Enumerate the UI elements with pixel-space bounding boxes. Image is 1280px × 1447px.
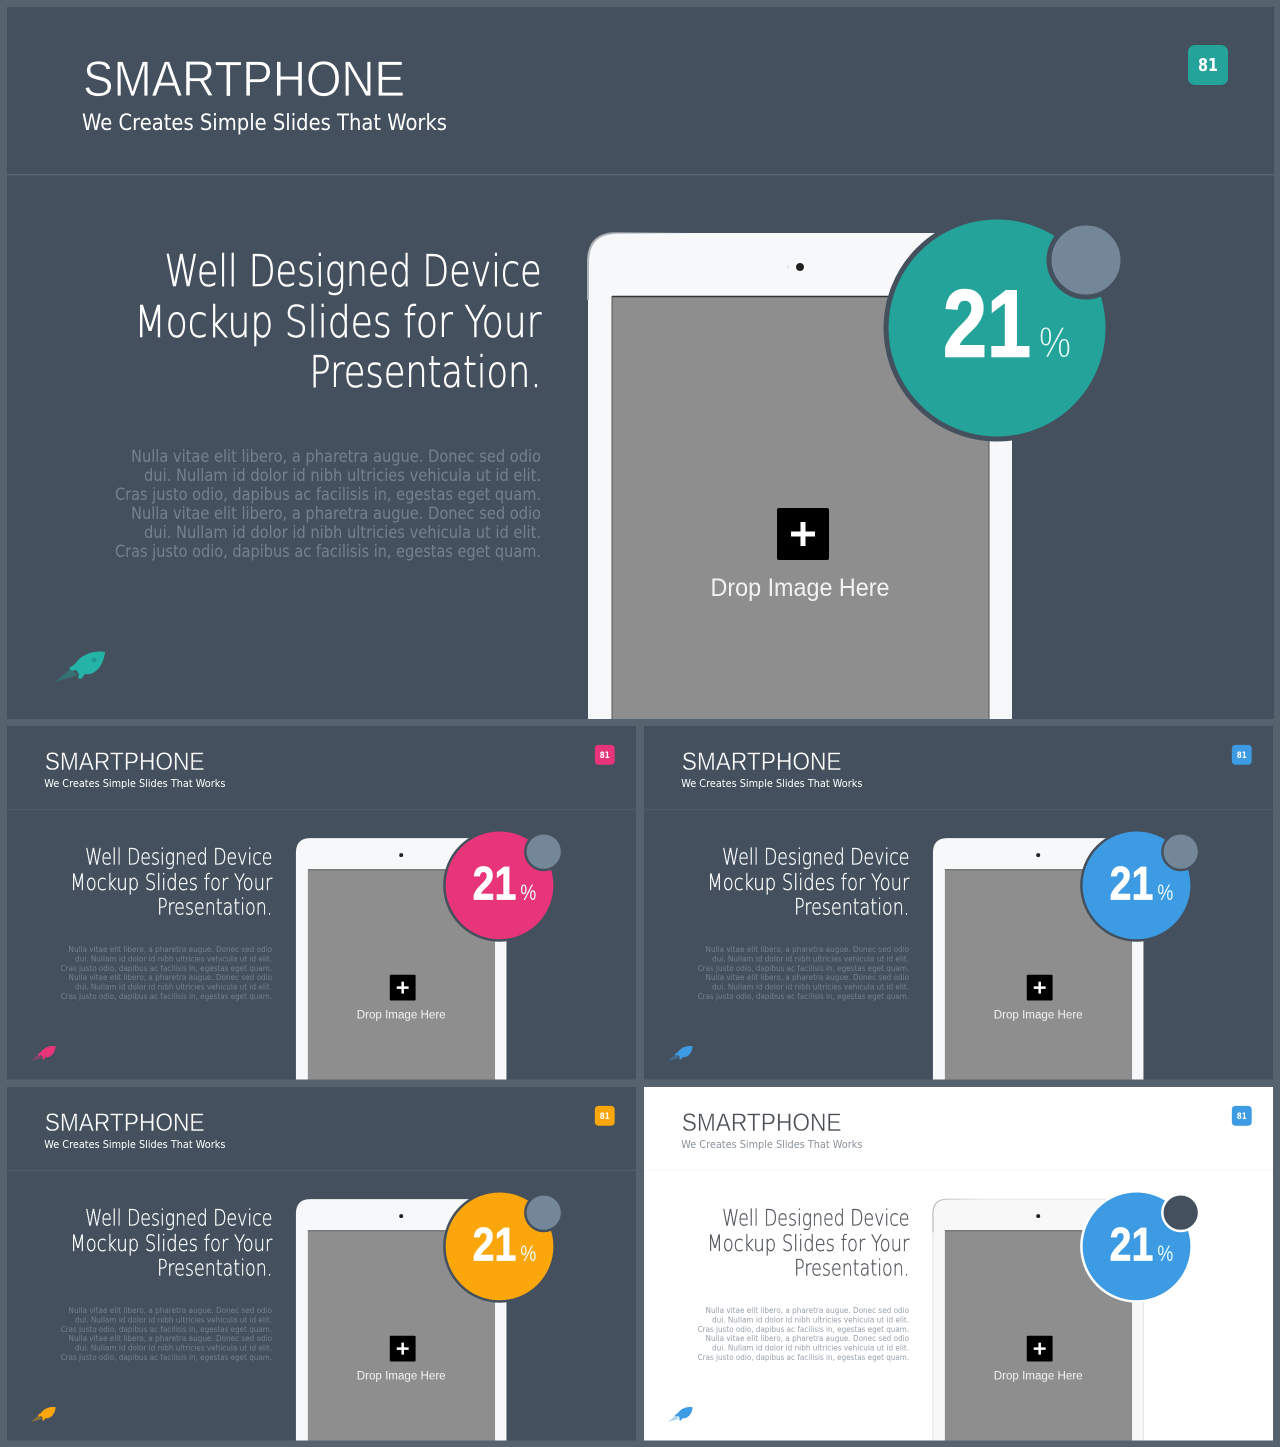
drop image placeholder <box>357 1336 446 1382</box>
body text: Nulla vitae elit libero, a pharetra augue. Donec sed odio <box>69 1305 272 1315</box>
body text: dui. Nullam id dolor id nibh ultricies vehicula ut id elit. <box>75 953 272 963</box>
body text <box>698 1305 909 1362</box>
body text: Nulla vitae elit libero, a pharetra augue. Donec sed odio <box>131 447 541 466</box>
badge: 81 <box>1198 55 1218 76</box>
badge <box>1232 745 1252 765</box>
heading <box>710 847 910 915</box>
body text: Cras justo odio, dapibus ac facilisis in, egestas eget quam. <box>698 1352 909 1362</box>
heading <box>707 1206 909 1282</box>
heading: Mockup Slides for Your <box>134 297 542 348</box>
drop image placeholder <box>357 975 446 1021</box>
stat circle: % <box>1039 318 1071 367</box>
stat circle: % <box>520 880 536 905</box>
heading: Presentation. <box>310 347 542 398</box>
badge: 81 <box>600 751 610 761</box>
heading: Presentation. <box>794 1257 909 1282</box>
icon: rocket <box>668 1046 693 1061</box>
icon: rocket <box>31 1046 56 1061</box>
subtitle: We Creates Simple Slides That Works <box>44 777 226 790</box>
body text: dui. Nullam id dolor id nibh ultricies vehicula ut id elit. <box>75 1314 272 1324</box>
body text <box>61 944 272 1001</box>
badge <box>1188 45 1228 85</box>
title: SMARTPHONE <box>83 51 405 107</box>
tablet mockup <box>588 233 1012 719</box>
body text: Cras justo odio, dapibus ac facilisis in, egestas eget quam. <box>698 991 909 1001</box>
body text: Nulla vitae elit libero, a pharetra augue. Donec sed odio <box>706 1333 909 1343</box>
body text: dui. Nullam id dolor id nibh ultricies vehicula ut id elit. <box>144 523 541 542</box>
badge <box>595 745 615 765</box>
heading: Mockup Slides for Your <box>70 871 272 896</box>
subtitle: We Creates Simple Slides That Works <box>681 1138 863 1151</box>
body text: dui. Nullam id dolor id nibh ultricies vehicula ut id elit. <box>712 1343 909 1353</box>
icon: rocket <box>55 652 105 682</box>
stat circle <box>444 830 562 940</box>
body text: Cras justo odio, dapibus ac facilisis in, egestas eget quam. <box>61 963 272 973</box>
badge <box>595 1106 615 1126</box>
body text: dui. Nullam id dolor id nibh ultricies vehicula ut id elit. <box>712 1314 909 1324</box>
panel: large teal slide <box>7 7 1274 719</box>
tablet mockup <box>933 838 1143 1079</box>
heading: Well Designed Device <box>164 246 542 297</box>
body text <box>698 944 909 1001</box>
body text <box>61 1305 272 1362</box>
stat circle: % <box>1157 1241 1173 1266</box>
stat circle: % <box>520 1241 536 1266</box>
heading <box>73 847 272 915</box>
heading: Presentation. <box>794 896 909 921</box>
heading: Mockup Slides for Your <box>70 1232 272 1257</box>
heading: Mockup Slides for Your <box>707 1232 909 1257</box>
heading: Well Designed Device <box>722 845 909 870</box>
body text: Cras justo odio, dapibus ac facilisis in, egestas eget quam. <box>61 1324 272 1334</box>
subtitle: We Creates Simple Slides That Works <box>82 111 447 136</box>
subtitle: We Creates Simple Slides That Works <box>681 777 863 790</box>
heading <box>140 252 542 388</box>
drop image placeholder: Drop Image Here <box>710 574 890 602</box>
heading: Well Designed Device <box>85 845 272 870</box>
stat circle: 21 <box>473 1219 516 1272</box>
body text: dui. Nullam id dolor id nibh ultricies vehicula ut id elit. <box>712 982 909 992</box>
body text: Cras justo odio, dapibus ac facilisis in, egestas eget quam. <box>698 963 909 973</box>
body text: dui. Nullam id dolor id nibh ultricies vehicula ut id elit. <box>75 982 272 992</box>
title: SMARTPHONE <box>45 749 205 776</box>
body text: Nulla vitae elit libero, a pharetra augue. Donec sed odio <box>69 1333 272 1343</box>
stat circle <box>1081 1191 1199 1301</box>
title: SMARTPHONE <box>682 1110 842 1137</box>
panel: pink slide <box>7 726 636 1079</box>
body text: Nulla vitae elit libero, a pharetra augue. Donec sed odio <box>706 1305 909 1315</box>
heading: Mockup Slides for Your <box>707 871 909 896</box>
stat circle <box>886 217 1123 439</box>
panel: blue slide <box>644 726 1273 1079</box>
body text: Cras justo odio, dapibus ac facilisis in, egestas eget quam. <box>115 542 541 561</box>
stat circle <box>444 1191 562 1301</box>
title: SMARTPHONE <box>45 1110 205 1137</box>
stat circle: 21 <box>473 858 516 911</box>
title: SMARTPHONE <box>682 749 842 776</box>
subtitle: We Creates Simple Slides That Works <box>44 1138 226 1151</box>
tablet mockup <box>296 838 506 1079</box>
badge <box>1232 1106 1252 1126</box>
heading: Well Designed Device <box>85 1206 272 1231</box>
body text: dui. Nullam id dolor id nibh ultricies vehicula ut id elit. <box>75 1343 272 1353</box>
body text: Nulla vitae elit libero, a pharetra augue. Donec sed odio <box>706 972 909 982</box>
body text: Cras justo odio, dapibus ac facilisis in, egestas eget quam. <box>115 485 541 504</box>
body text: Nulla vitae elit libero, a pharetra augue. Donec sed odio <box>69 944 272 954</box>
body text <box>115 447 541 561</box>
body text: Cras justo odio, dapibus ac facilisis in, egestas eget quam. <box>698 1324 909 1334</box>
drop image placeholder: Drop Image Here <box>994 1368 1083 1382</box>
icon: rocket <box>668 1407 693 1422</box>
heading <box>73 1208 272 1276</box>
drop image placeholder <box>994 975 1083 1021</box>
drop image placeholder: Drop Image Here <box>994 1007 1083 1021</box>
badge: 81 <box>1237 751 1247 761</box>
body text: Cras justo odio, dapibus ac facilisis in, egestas eget quam. <box>61 991 272 1001</box>
stat circle <box>1081 830 1199 940</box>
body text: Nulla vitae elit libero, a pharetra augue. Donec sed odio <box>706 944 909 954</box>
tablet mockup <box>296 1199 506 1440</box>
stat circle: 21 <box>1110 858 1153 911</box>
body text: dui. Nullam id dolor id nibh ultricies vehicula ut id elit. <box>144 466 541 485</box>
panel: orange slide <box>7 1087 636 1440</box>
stat circle: % <box>1157 880 1173 905</box>
badge: 81 <box>600 1112 610 1122</box>
tablet mockup <box>933 1199 1143 1440</box>
heading: Well Designed Device <box>722 1206 909 1231</box>
stat circle: 21 <box>943 270 1031 378</box>
body text: Cras justo odio, dapibus ac facilisis in, egestas eget quam. <box>61 1352 272 1362</box>
drop image placeholder <box>994 1336 1083 1382</box>
heading: Presentation. <box>157 1257 272 1282</box>
drop image placeholder: Drop Image Here <box>357 1368 446 1382</box>
drop image placeholder <box>710 508 890 602</box>
body text: Nulla vitae elit libero, a pharetra augue. Donec sed odio <box>69 972 272 982</box>
stat circle: 21 <box>1110 1219 1153 1272</box>
badge: 81 <box>1237 1112 1247 1122</box>
icon: rocket <box>31 1407 56 1422</box>
panel: white slide <box>644 1087 1273 1440</box>
heading: Presentation. <box>157 896 272 921</box>
drop image placeholder: Drop Image Here <box>357 1007 446 1021</box>
body text: dui. Nullam id dolor id nibh ultricies vehicula ut id elit. <box>712 953 909 963</box>
body text: Nulla vitae elit libero, a pharetra augue. Donec sed odio <box>131 504 541 523</box>
